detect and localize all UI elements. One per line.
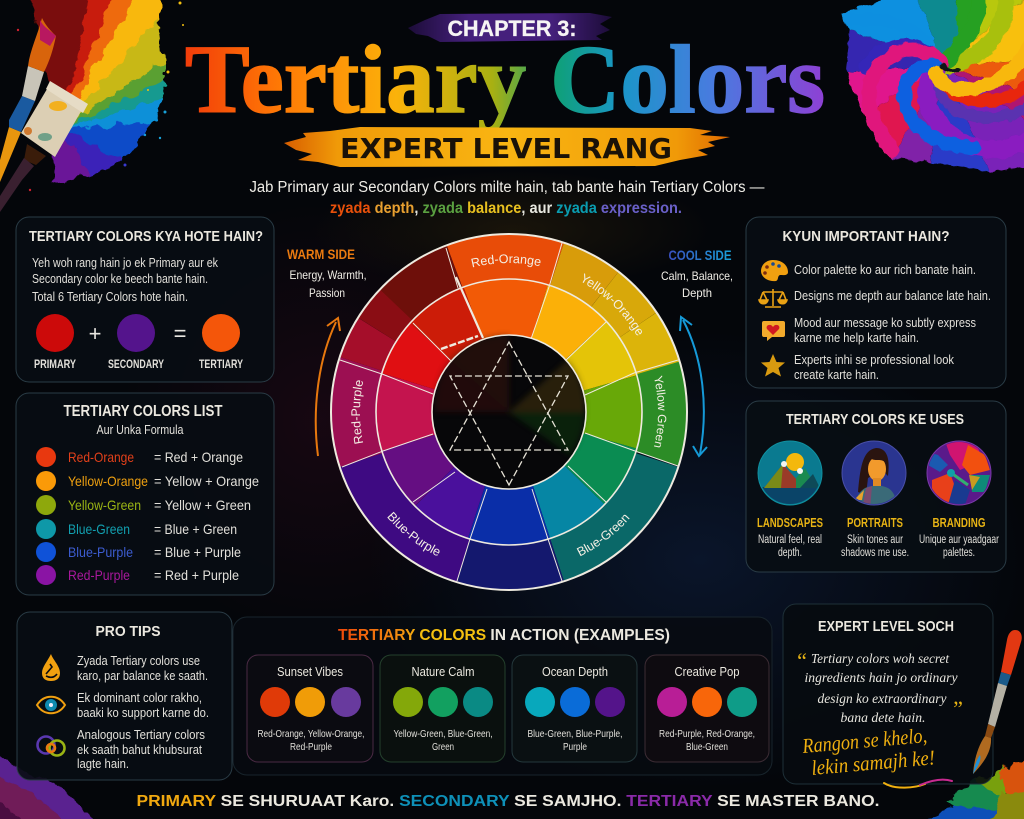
panel heading: PRO TIPS (96, 623, 160, 640)
cool side label: Depth (682, 286, 712, 300)
icon: palette (761, 260, 788, 281)
panel heading: TERTIARY COLORS KYA HOTE HAIN? (29, 228, 263, 245)
list text: Designs me depth aur balance late hain. (794, 288, 991, 303)
swash under callout (884, 780, 952, 788)
card: creative pop: Red-Purple, Red-Orange, (659, 728, 755, 740)
icon: star (761, 354, 785, 376)
subtitle banner (284, 127, 730, 167)
color equation: SECONDARY (108, 359, 164, 371)
dashed star (450, 342, 568, 485)
color formula rows: = Red + Orange (154, 449, 243, 465)
handwritten callout: Rangon se khelo, (800, 723, 928, 758)
handwritten callout (800, 723, 936, 780)
color formula rows: = Yellow + Green (154, 497, 251, 513)
panel heading: KYUN IMPORTANT HAIN? (782, 228, 950, 245)
card: creative pop: Blue-Green (686, 741, 728, 753)
use descriptions: shadows me use. (841, 547, 909, 559)
quote: ” (953, 696, 963, 721)
panel: what are tertiary colors (16, 217, 274, 382)
use descriptions: Unique aur yaadgaar (919, 534, 999, 546)
quote: “ (797, 648, 807, 673)
color formula rows: = Red + Purple (154, 567, 239, 583)
icon: landscape (758, 441, 822, 507)
color wheel (330, 233, 688, 591)
panel: in action examples (233, 617, 772, 775)
outer ring segments (289, 192, 729, 632)
card: sunset vibes: Red-Purple (290, 741, 332, 753)
inner ring segments (361, 264, 657, 560)
paint splash: bottom right (915, 755, 1024, 819)
panel: pro tips (17, 612, 232, 780)
tips text: Analogous Tertiary colors (77, 727, 205, 742)
card: ocean depth (512, 655, 637, 762)
chapter banner: CHAPTER 3: (448, 16, 576, 41)
wheel labels: Blue-Green (576, 514, 630, 556)
wheel labels: Red-Purple (351, 380, 364, 444)
icon: paint brush top left (0, 18, 56, 182)
list text (794, 262, 991, 382)
wheel center (432, 335, 586, 489)
tips text: Zyada Tertiary colors use (77, 653, 200, 668)
icon: paint brush bottom right (973, 630, 1022, 774)
chapter banner (408, 13, 612, 42)
title: Tertiary Colors (185, 26, 825, 134)
explanation text: Secondary color ke beech bante hain. (32, 271, 208, 286)
color equation: PRIMARY (34, 359, 76, 371)
card: sunset vibes: Sunset Vibes (277, 664, 343, 679)
color equation (34, 314, 243, 371)
card: nature calm: Green (432, 741, 454, 753)
color formula rows: = Blue + Purple (154, 544, 241, 560)
tips text: ek saath bahut khubsurat (77, 742, 202, 757)
use descriptions: Natural feel, real (758, 534, 822, 546)
panel: expert level soch (783, 604, 993, 784)
quote (797, 648, 963, 725)
paint speckles: top left (17, 2, 184, 191)
explanation text: Yeh woh rang hain jo ek Primary aur ek (32, 255, 218, 270)
icon: drop (42, 654, 60, 681)
panel heading: EXPERT LEVEL SOCH (818, 618, 954, 635)
icon: portrait (842, 441, 906, 510)
icon: branding (927, 441, 991, 505)
wheel labels: Blue-Purple (387, 512, 440, 556)
tips text (77, 653, 209, 771)
arrow: cool side (680, 317, 707, 456)
color formula rows: Blue-Purple (68, 544, 133, 560)
tips text: baaki ko support karne do. (77, 705, 209, 720)
card: ocean depth: Ocean Depth (542, 664, 608, 679)
icon: balance scales (759, 289, 787, 307)
use descriptions (758, 534, 999, 559)
panel: tertiary colors list (16, 393, 274, 595)
quote: bana dete hain. (840, 710, 926, 725)
intro text: Jab Primary aur Secondary Colors milte hain, tab bante hain Tertiary Colors — (250, 179, 765, 196)
cool side label (661, 248, 733, 300)
ring outlines and separators (331, 234, 687, 590)
card: nature calm: Yellow-Green, Blue-Green, (394, 728, 492, 740)
explanation text: Total 6 Tertiary Colors hote hain. (32, 289, 188, 304)
icon: eye (37, 697, 65, 713)
use descriptions: palettes. (943, 547, 975, 559)
tips text: lagte hain. (77, 756, 129, 771)
icon: rings (38, 736, 64, 756)
paint splash: top left rainbow (25, 0, 166, 182)
paint splash: bottom left (0, 750, 100, 819)
wheel labels: Yellow-Orange (582, 273, 642, 336)
intro text: zyada depth, zyada balance, aur zyada expression. (330, 200, 682, 217)
icon: chat heart (762, 321, 785, 341)
card: nature calm (380, 655, 505, 762)
panel heading: TERTIARY COLORS LIST (64, 403, 223, 420)
intro text (250, 179, 765, 217)
warm side label (287, 247, 366, 300)
list text: Mood aur message ko subtly express (794, 315, 976, 330)
panel: why important (746, 217, 1006, 388)
use labels: BRANDING (932, 515, 986, 530)
list text: Color palette ko aur rich banate hain. (794, 262, 976, 277)
arrow: warm side (316, 318, 340, 456)
cool side label: COOL SIDE (668, 248, 732, 263)
card: ocean depth: Purple (563, 741, 587, 753)
color formula rows: = Yellow + Orange (154, 473, 259, 489)
wheel labels (351, 254, 666, 556)
footer tagline: PRIMARY SE SHURUAAT Karo. SECONDARY SE SAMJHO. TERTIARY SE MASTER BANO. (136, 793, 879, 810)
card: nature calm: Nature Calm (412, 664, 474, 679)
card: creative pop (645, 655, 769, 762)
color equation: = (174, 321, 186, 346)
list text: Experts inhi se professional look (794, 352, 954, 367)
list text: create karte hain. (794, 367, 879, 382)
color formula rows: Yellow-Orange (68, 473, 148, 489)
cool side label: Calm, Balance, (661, 269, 733, 283)
handwritten callout: lekin samajh ke! (810, 745, 936, 780)
use labels: PORTRAITS (847, 515, 903, 530)
color formula rows: Yellow-Green (68, 497, 141, 513)
tips text: karo, par balance ke saath. (77, 668, 208, 683)
warm side label: Passion (309, 286, 345, 300)
use descriptions: Skin tones aur (847, 534, 903, 546)
color equation: + (89, 321, 101, 346)
panel heading (64, 403, 223, 437)
card: sunset vibes (247, 655, 373, 762)
color equation: TERTIARY (199, 359, 243, 371)
tips text: Ek dominant color rakho, (77, 690, 202, 705)
color formula rows: Red-Purple (68, 567, 130, 583)
color formula rows: = Blue + Green (154, 521, 237, 537)
quote: Tertiary colors woh secret (811, 651, 950, 666)
panel heading: TERTIARY COLORS KE USES (786, 411, 964, 428)
color formula rows: Blue-Green (68, 521, 130, 537)
card: ocean depth: Blue-Green, Blue-Purple, (528, 728, 622, 740)
quote: ingredients hain jo ordinary (804, 670, 958, 685)
subtitle banner: EXPERT LEVEL RANG (340, 132, 672, 165)
warm side label: WARM SIDE (287, 247, 355, 262)
paint swirl: top right (840, 0, 1024, 172)
list text: karne me help karte hain. (794, 330, 919, 345)
use labels (757, 515, 986, 530)
color formula rows (36, 447, 259, 585)
center tints (435, 335, 585, 455)
wheel labels: Yellow Green (654, 375, 666, 448)
wheel labels: Red-Orange (471, 254, 540, 268)
warm side label: Energy, Warmth, (290, 268, 366, 282)
card: creative pop: Creative Pop (674, 664, 740, 679)
quote: design ko extraordinary (818, 691, 946, 706)
panel: uses (746, 401, 1006, 572)
explanation text (32, 255, 218, 304)
color formula rows: Red-Orange (68, 449, 134, 465)
panel heading: TERTIARY COLORS IN ACTION (EXAMPLES) (338, 627, 670, 644)
use descriptions: depth. (778, 547, 802, 559)
icon: paint jar top left (0, 81, 88, 212)
panel heading: Aur Unka Formula (96, 422, 184, 437)
card: sunset vibes: Red-Orange, Yellow-Orange, (258, 728, 364, 740)
use labels: LANDSCAPES (757, 515, 823, 530)
